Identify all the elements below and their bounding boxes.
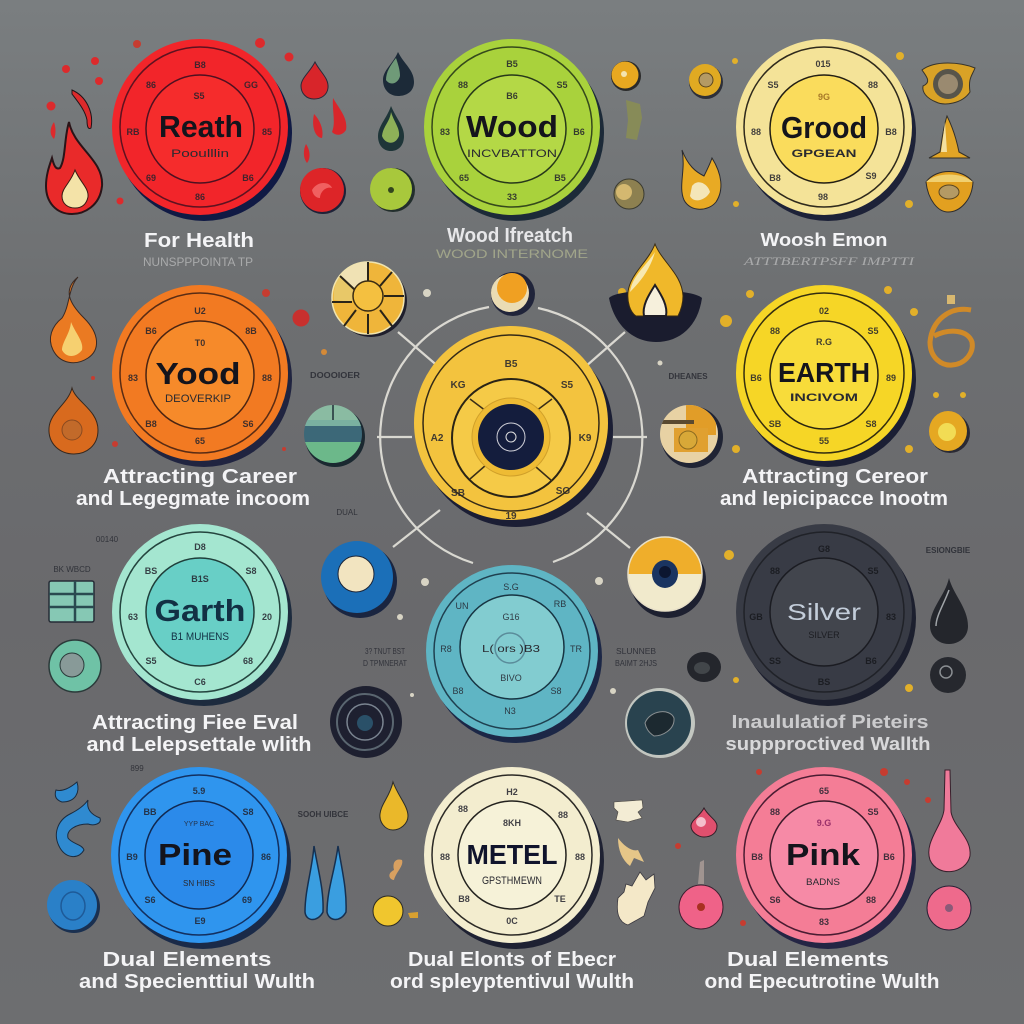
panel: Yood disk: U2 bbox=[194, 306, 206, 316]
icon: red dot bbox=[292, 310, 327, 355]
panel: Yood disk: B6 bbox=[145, 326, 157, 336]
panel: Good disk: B8 bbox=[769, 173, 781, 183]
panel: center yellow disk: S5 bbox=[561, 380, 574, 391]
panel: Reath disk: 86 bbox=[146, 80, 156, 90]
panel: Yood disk: Yood bbox=[156, 356, 240, 391]
decorative specks bbox=[53, 40, 971, 926]
panel: center teal disk: BIVO bbox=[500, 673, 522, 683]
panel: center yellow disk bbox=[414, 326, 613, 527]
panel: center yellow disk: B5 bbox=[505, 359, 518, 370]
panel: Yood disk: T0 bbox=[195, 338, 205, 348]
panel: Metel disk: 0C bbox=[506, 916, 518, 926]
panel: Silver disk bbox=[736, 524, 916, 706]
panel: Earth disk: 89 bbox=[886, 373, 896, 383]
panel: Pink disk: B8 bbox=[751, 852, 763, 862]
icon: olive flecks bbox=[614, 100, 644, 209]
label: insulation wealth bbox=[726, 712, 930, 754]
label: wood emon: ATTTBERTPSFF IMPTTI bbox=[743, 254, 915, 268]
panel: Good disk: S5 bbox=[767, 80, 779, 90]
icon: blue curl and drop bbox=[55, 782, 100, 857]
icon: gold cone bbox=[929, 116, 970, 158]
panel: center yellow disk: SG bbox=[556, 486, 570, 497]
panel: Pink disk: 83 bbox=[819, 917, 829, 927]
caption: right small bbox=[615, 647, 657, 668]
decorative specks: SOOH UIBCE bbox=[298, 810, 349, 819]
panel: Good disk: 015 bbox=[815, 59, 831, 69]
panel: Garth disk: S5 bbox=[145, 656, 157, 666]
label: dual elements three: ond Epecutrotine Wulth bbox=[704, 971, 940, 993]
panel: Pine disk: E9 bbox=[194, 916, 206, 926]
label: wood income: Wood Ifreatch bbox=[447, 225, 573, 247]
panel: Garth disk: BS bbox=[145, 566, 157, 576]
label: attracting career right bbox=[720, 466, 948, 510]
panel: Metel disk: 88 bbox=[575, 852, 585, 862]
panel: Good disk bbox=[736, 39, 916, 221]
panel: Wood disk: S5 bbox=[556, 80, 568, 90]
panel: Good disk: 98 bbox=[818, 192, 828, 202]
label: for health bbox=[143, 230, 254, 269]
panel: Pine disk: BB bbox=[144, 807, 157, 817]
panel: center teal disk bbox=[426, 565, 602, 743]
panel: Metel disk: B8 bbox=[458, 894, 470, 904]
panel: Yood disk: S6 bbox=[242, 419, 254, 429]
label: attracting career left: Attracting Career bbox=[103, 466, 297, 488]
panel: Pine disk: YYP BAC bbox=[184, 821, 214, 828]
icon: dark teardrop bbox=[930, 578, 968, 644]
panel: Metel disk: METEL bbox=[466, 839, 558, 870]
panel: Wood disk bbox=[424, 39, 604, 221]
icon: amber square ball bbox=[660, 405, 723, 468]
label: attracting career left: and Legegmate incoom bbox=[76, 488, 310, 510]
icon: dark target ball bbox=[330, 686, 402, 758]
label: wood emon: Woosh Emon bbox=[760, 230, 888, 250]
label: attracting free bbox=[86, 712, 312, 756]
decorative specks: BK WBCD bbox=[53, 565, 91, 574]
panel: center teal disk: TR bbox=[570, 644, 582, 654]
panel: Metel disk: H2 bbox=[506, 787, 518, 797]
panel: center teal disk: S8 bbox=[550, 686, 562, 696]
panel: Pink disk: 88 bbox=[770, 807, 780, 817]
panel: Yood disk: 83 bbox=[128, 373, 138, 383]
panel: Garth disk: B1S bbox=[191, 574, 209, 584]
panel: Good disk: S9 bbox=[865, 171, 877, 181]
panel: Earth disk: 88 bbox=[770, 326, 780, 336]
panel: Reath disk: S5 bbox=[193, 91, 205, 101]
decorative specks: DHEANES bbox=[668, 372, 708, 381]
icon: oil lamp flame bbox=[609, 244, 702, 342]
icon: flame pair bbox=[682, 150, 721, 209]
icon: red flame bbox=[46, 122, 102, 214]
panel: center teal disk: G16 bbox=[502, 612, 520, 622]
panel: Silver disk: G8 bbox=[818, 544, 830, 554]
label: dual elements two: ord spleyptentivul Wulth bbox=[390, 971, 634, 993]
panel: Pine disk bbox=[111, 767, 291, 949]
panel: Metel disk: TE bbox=[554, 894, 566, 904]
panel: center yellow disk: 19 bbox=[505, 511, 517, 522]
panel: Earth disk: INCIVOM bbox=[790, 392, 858, 404]
icon: pink tall vase bbox=[929, 770, 970, 872]
panel: Pink disk: 65 bbox=[819, 786, 829, 796]
panel: center teal disk: UN bbox=[456, 601, 468, 611]
icon: dark teal lens bbox=[625, 688, 695, 758]
panel: Pink disk: 9.G bbox=[817, 818, 831, 828]
label: dual elements one: Dual Elements bbox=[102, 949, 272, 971]
panel: Garth disk: 63 bbox=[128, 612, 138, 622]
panel: Earth disk: R.G bbox=[816, 337, 832, 347]
panel: Reath disk: GG bbox=[244, 80, 258, 90]
panel: Pine disk: SN HIBS bbox=[183, 879, 215, 888]
label: attracting career left bbox=[76, 466, 310, 510]
panel: Garth disk: C6 bbox=[194, 677, 206, 687]
panel: Garth disk bbox=[112, 524, 292, 706]
label: dual elements three bbox=[704, 949, 940, 993]
panel: Metel disk: GPSTHMEWN bbox=[482, 875, 542, 887]
panel: Silver disk: GB bbox=[749, 612, 763, 622]
icon: gold eye bbox=[922, 63, 975, 104]
panel: Reath disk: RB bbox=[126, 127, 140, 137]
panel: Wood disk: 33 bbox=[507, 192, 517, 202]
label: dual elements two: Dual Elonts of Ebecr bbox=[408, 949, 616, 971]
icon: dark pebble bbox=[687, 652, 721, 682]
panel: center teal disk: L( ors )B3 bbox=[482, 644, 541, 655]
panel: Earth disk: EARTH bbox=[778, 357, 870, 388]
panel: Garth disk: 20 bbox=[262, 612, 272, 622]
panel: Wood disk: B6 bbox=[573, 127, 585, 137]
icon: dark green drop bbox=[383, 52, 414, 96]
panel: center teal disk: N3 bbox=[504, 706, 516, 716]
panel: Earth disk: B6 bbox=[750, 373, 762, 383]
panel: Pink disk: S6 bbox=[769, 895, 781, 905]
icon: dark bead bbox=[930, 657, 966, 693]
panel: Pine disk: 86 bbox=[261, 852, 271, 862]
label: insulation wealth: suppproctived Wallth bbox=[726, 734, 930, 754]
panel: Earth disk: S8 bbox=[865, 419, 877, 429]
caption: left small: DUAL bbox=[336, 508, 358, 517]
panel: Yood disk bbox=[112, 285, 292, 467]
icon: teal ring bbox=[49, 640, 101, 692]
icon: orange flame bbox=[50, 277, 97, 363]
panel: Garth disk: D8 bbox=[194, 542, 206, 552]
panel: center yellow disk: SB bbox=[451, 488, 465, 499]
panel: Earth disk: 55 bbox=[819, 436, 829, 446]
panel: Pine disk: S8 bbox=[242, 807, 254, 817]
panel: Wood disk: B6 bbox=[506, 91, 518, 101]
caption: left small: 3? TNUT BST bbox=[365, 647, 405, 656]
panel: Silver disk: SS bbox=[769, 656, 781, 666]
panel: Pink disk: 88 bbox=[866, 895, 876, 905]
panel: Reath disk: B8 bbox=[194, 60, 206, 70]
panel: Metel disk bbox=[424, 767, 604, 949]
panel: Pink disk: B6 bbox=[883, 852, 895, 862]
icon: gold number six bbox=[930, 295, 972, 365]
panel: Silver disk: S5 bbox=[867, 566, 879, 576]
caption: right small: BAIMT 2HJS bbox=[615, 659, 657, 668]
icon: red ball bbox=[300, 168, 346, 214]
caption: left small: D TPMNERAT bbox=[363, 659, 407, 668]
label: dual elements two bbox=[390, 949, 634, 993]
panel: center yellow disk: K9 bbox=[579, 433, 592, 444]
label: attracting career right: Attracting Cereor bbox=[742, 466, 928, 488]
caption: right of Yood: DOOOIOER bbox=[310, 371, 360, 380]
panel: Wood disk: INCVBATTON bbox=[467, 148, 557, 160]
icon: red droplets left bbox=[46, 38, 294, 204]
panel: center teal disk: B8 bbox=[452, 686, 464, 696]
panel: Good disk: Grood bbox=[781, 110, 867, 145]
panel: Pink disk: BADNS bbox=[806, 877, 840, 887]
label: wood emon bbox=[743, 230, 915, 268]
panel: Reath disk: Reath bbox=[159, 109, 243, 144]
panel: Reath disk: 86 bbox=[195, 192, 205, 202]
panel: Yood disk: DEOVERKIP bbox=[165, 393, 231, 405]
label: wood income bbox=[436, 225, 588, 261]
panel: Silver disk: 88 bbox=[770, 566, 780, 576]
diagram: central connector rings bbox=[377, 307, 647, 563]
decorative specks: ESIONGBIE bbox=[926, 546, 971, 555]
icon: gold bead bbox=[611, 61, 641, 91]
panel: Pine disk: 69 bbox=[242, 895, 252, 905]
panel: Reath disk bbox=[112, 39, 292, 221]
icon: striped teal ball bbox=[303, 404, 365, 467]
label: for health: For Health bbox=[144, 230, 254, 252]
caption: left small bbox=[336, 508, 407, 668]
panel: Earth disk: 02 bbox=[819, 306, 829, 316]
icon: red drop bbox=[301, 62, 328, 99]
panel: Wood disk: B5 bbox=[554, 173, 566, 183]
label: dual elements three: Dual Elements bbox=[727, 949, 889, 971]
panel: Metel disk: 8KH bbox=[503, 818, 521, 828]
panel: Reath disk: B6 bbox=[242, 173, 254, 183]
panel: Metel disk: 88 bbox=[458, 804, 468, 814]
panel: Garth disk: B1 MUHENS bbox=[171, 631, 229, 643]
panel: Pine disk: B9 bbox=[126, 852, 138, 862]
panel: center teal disk: S.G bbox=[503, 582, 519, 592]
panel: Earth disk: SB bbox=[769, 419, 782, 429]
panel: Garth disk: 68 bbox=[243, 656, 253, 666]
panel: Yood disk: 65 bbox=[195, 436, 205, 446]
icon: red twin flames bbox=[304, 98, 346, 163]
caption: right small: SLUNNEB bbox=[616, 647, 656, 656]
decorative specks: 00140 bbox=[96, 535, 119, 544]
label: dual elements one: and Specienttiul Wulth bbox=[79, 971, 315, 993]
panel: Earth disk bbox=[736, 285, 916, 467]
panel: center yellow disk: A2 bbox=[431, 433, 444, 444]
panel: Good disk: 88 bbox=[751, 127, 761, 137]
panel: center teal disk: R8 bbox=[440, 644, 452, 654]
panel: Yood disk: B8 bbox=[145, 419, 157, 429]
icon: green drop bbox=[378, 106, 404, 151]
icon: gold bell bbox=[929, 411, 970, 453]
icon: pink ball right bbox=[927, 886, 971, 930]
panel: Garth disk: S8 bbox=[245, 566, 257, 576]
panel: Reath disk: 69 bbox=[146, 173, 156, 183]
icon: blue ball bbox=[321, 541, 397, 618]
panel: Good disk: B8 bbox=[885, 127, 897, 137]
label: attracting career right: and Iepicipacce Inootm bbox=[720, 488, 948, 510]
panel: center yellow disk: KG bbox=[450, 380, 466, 391]
panel: Silver disk: Silver bbox=[787, 599, 861, 625]
panel: Pink disk: S5 bbox=[867, 807, 879, 817]
decorative specks: 899 bbox=[130, 764, 144, 773]
panel: Wood disk: Wood bbox=[466, 109, 558, 144]
icon: cream flames bbox=[614, 800, 655, 925]
panel: Reath disk: Pooulllin bbox=[171, 148, 229, 160]
icon: yellow white eye ball bbox=[628, 537, 706, 618]
panel: Pink disk: Pink bbox=[786, 837, 861, 872]
label: attracting free: Attracting Fiee Eval bbox=[92, 712, 298, 734]
icon: blue tall drops bbox=[305, 846, 346, 920]
panel: Earth disk: S5 bbox=[867, 326, 879, 336]
icon: gold ring bbox=[689, 64, 723, 99]
panel: Good disk: GPGEAN bbox=[792, 148, 857, 160]
icon: teal stacked tiles bbox=[49, 581, 94, 622]
panel: Yood disk: 88 bbox=[262, 373, 272, 383]
panel: Silver disk: 83 bbox=[886, 612, 896, 622]
icon: blue ball left bbox=[47, 880, 100, 933]
panel: Pink disk bbox=[736, 767, 916, 949]
icon: sectioned gold wheel bbox=[332, 262, 407, 337]
label: insulation wealth: Inaululatiof Pieteirs bbox=[732, 712, 928, 732]
panel: Wood disk: 88 bbox=[458, 80, 468, 90]
label: attracting free: and Lelepsettale wlith bbox=[86, 734, 312, 756]
panel: Good disk: 88 bbox=[868, 80, 878, 90]
panel: center teal disk: RB bbox=[554, 599, 566, 609]
panel: Pine disk: S6 bbox=[144, 895, 156, 905]
panel: Wood disk: 65 bbox=[459, 173, 469, 183]
panel: Reath disk: 85 bbox=[262, 127, 272, 137]
panel: Silver disk: SILVER bbox=[808, 630, 840, 640]
panel: Pine disk: 5.9 bbox=[193, 786, 205, 796]
panel: Garth disk: Garth bbox=[154, 593, 246, 628]
icon: orange drop bbox=[49, 388, 98, 454]
label: wood income: WOOD INTERNOME bbox=[436, 247, 588, 261]
label: for health: NUNSPPPOINTA TP bbox=[143, 255, 253, 269]
icon: gold droplets center bbox=[373, 782, 418, 926]
panel: Silver disk: B6 bbox=[865, 656, 877, 666]
panel: Wood disk: 83 bbox=[440, 127, 450, 137]
panel: Metel disk: 88 bbox=[440, 852, 450, 862]
icon: green ball bbox=[370, 168, 415, 212]
label: dual elements one bbox=[79, 949, 315, 993]
panel: Wood disk: B5 bbox=[506, 59, 518, 69]
panel: Metel disk: 88 bbox=[558, 810, 568, 820]
panel: Pine disk: Pine bbox=[158, 837, 232, 872]
panel: Silver disk: BS bbox=[818, 677, 830, 687]
icon: gold bowl bbox=[926, 172, 973, 212]
icon: pink drop and ball left bbox=[679, 808, 723, 929]
panel: Yood disk: 8B bbox=[245, 326, 257, 336]
panel: Good disk: 9G bbox=[818, 92, 830, 102]
icon: orange orb bbox=[491, 272, 535, 316]
